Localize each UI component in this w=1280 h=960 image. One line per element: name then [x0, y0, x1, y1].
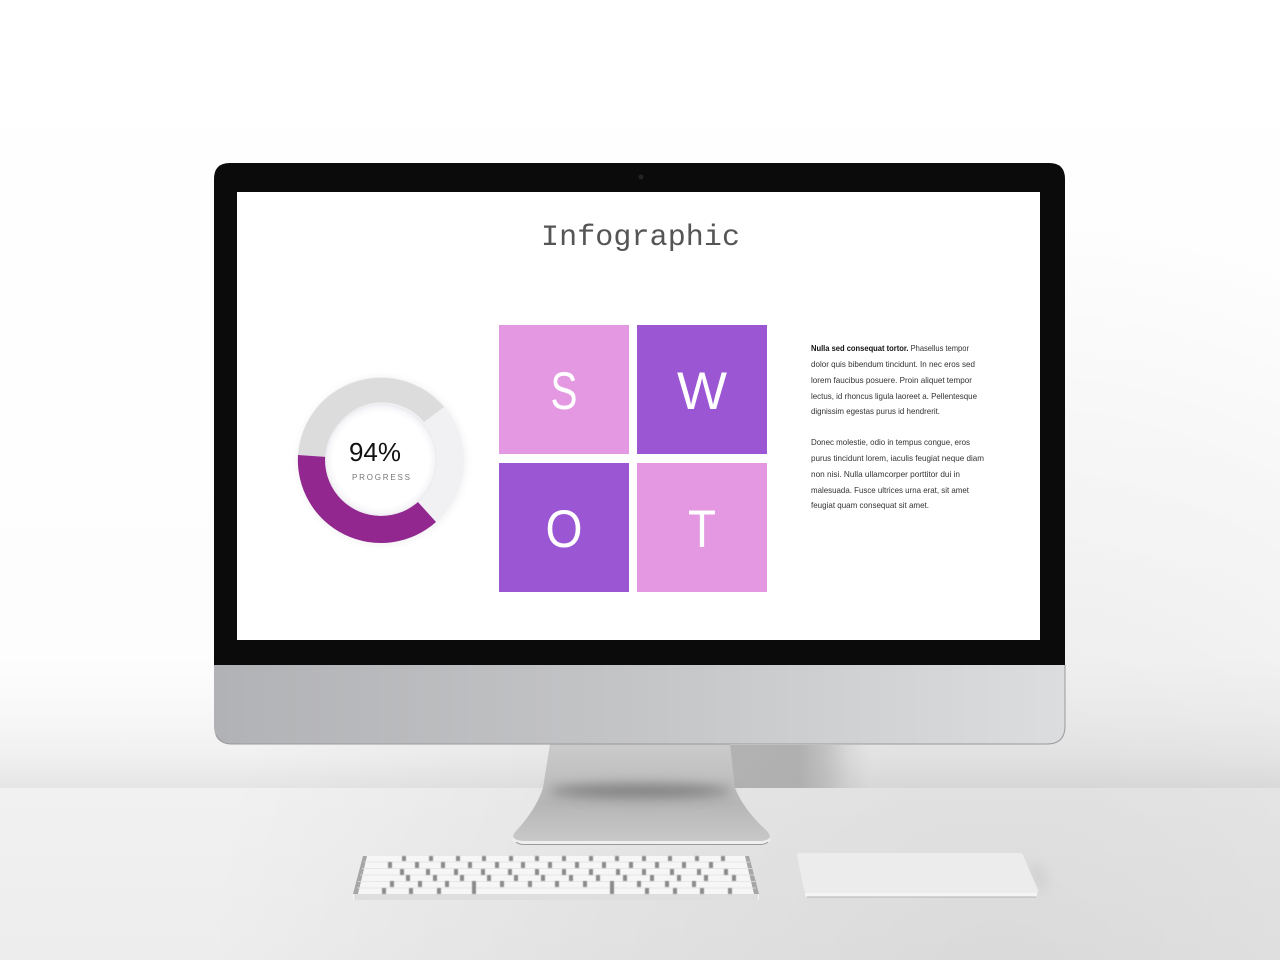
- purple segment: [298, 455, 436, 543]
- SWOT grid: [499, 325, 767, 592]
- tile W: W: [677, 362, 727, 421]
- body text: non nisi. Nulla ullamcorper porttitor dui in: [811, 469, 960, 479]
- ring track: [298, 377, 464, 543]
- chart shadow: [298, 377, 466, 545]
- monitor body: [214, 665, 1065, 744]
- stand shadow on wall: [728, 745, 870, 788]
- trackpad surface: [797, 853, 1038, 893]
- trackpad lip: [805, 893, 1037, 897]
- body text: malesuada. Fusce ultrices urna erat, sit amet: [811, 485, 970, 495]
- body text: feugiat quam consequat sit amet.: [811, 500, 929, 510]
- tile T: T: [688, 500, 716, 559]
- center disc: [325, 404, 437, 516]
- body text: lorem faucibus posuere. Proin aliquet tempor: [811, 375, 972, 385]
- trackpad: [797, 853, 1046, 897]
- monitor: [214, 163, 1065, 744]
- tile O: [499, 463, 629, 592]
- body text: lectus, id rhoncus ligula laoreet a. Pellentesque: [811, 391, 977, 401]
- camera: [638, 174, 644, 180]
- tile T: [637, 463, 767, 592]
- title: Infographic: [541, 221, 740, 255]
- stand lip: [513, 837, 770, 844]
- body text: dignissim egestas purus id hendrerit.: [811, 406, 940, 416]
- body text: dolor quis bibendum tincidunt. In nec eros sed: [811, 359, 975, 369]
- desk surface: [0, 788, 1280, 960]
- tile S: [499, 325, 629, 454]
- body text: Donec molestie, odio in tempus congue, eros: [811, 437, 970, 447]
- screen slide: [237, 192, 1040, 640]
- body text: [811, 343, 984, 510]
- stand shadow band: [548, 784, 732, 798]
- trackpad shadow: [1024, 862, 1046, 892]
- monitor stand: [513, 744, 770, 844]
- gray segment: [298, 378, 444, 457]
- stand body: [513, 744, 770, 841]
- body text: purus tincidunt lorem, iaculis feugiat neque diam: [811, 453, 984, 463]
- percent value: 94%: [349, 437, 401, 467]
- donut chart: 94% progress: [298, 377, 466, 545]
- progress label: PROGRESS: [352, 473, 410, 482]
- body text: Nulla sed consequat tortor. Phasellus tempor: [811, 343, 969, 353]
- black bezel: [214, 163, 1065, 665]
- tile W: [637, 325, 767, 454]
- keyboard: [353, 856, 759, 900]
- tile O: O: [546, 500, 582, 559]
- tile S: S: [550, 362, 578, 421]
